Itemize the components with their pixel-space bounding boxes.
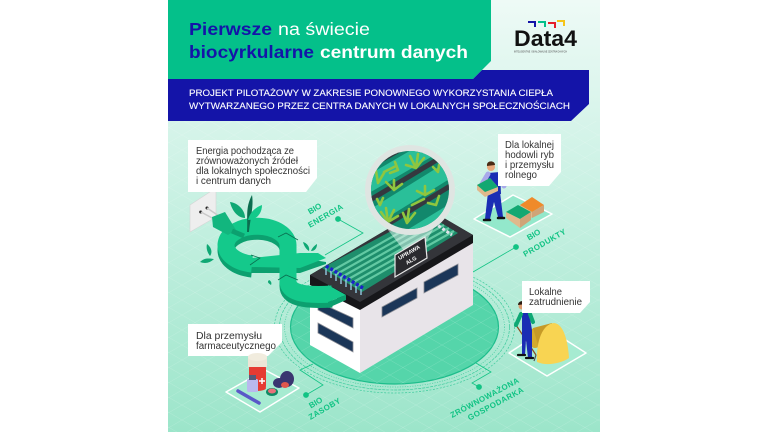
white connectors [430, 220, 452, 235]
connector lines [300, 216, 518, 398]
circular arrow [226, 226, 346, 308]
subtitle banner: WYTWARZANEGO PRZEZ CENTRA DANYCH W LOKALNYCH SPOŁECZNOŚCIACH [189, 100, 570, 112]
callout: energia: zrównoważonych źródeł [196, 156, 299, 167]
callout: zatrudnienie: Lokalne [529, 287, 562, 298]
arrow joints [250, 233, 298, 280]
right wall [360, 241, 473, 373]
ground circle [274, 261, 514, 393]
label: bio energia: BIO [306, 201, 323, 216]
subtitle banner [168, 70, 589, 121]
crate: greens [506, 205, 531, 228]
worker with crate [477, 161, 504, 220]
vial [247, 375, 258, 392]
building [310, 207, 473, 373]
crate held [477, 178, 498, 197]
label: zrownowazona gospodarka: ZRÓWNOWAŻONA [449, 376, 521, 420]
label: bio energia: ENERGIA [307, 202, 345, 230]
logo: Data4: Data4 [514, 26, 578, 51]
callout: energia: dla lokalnych społeczności [196, 166, 310, 177]
header: green title banner [168, 0, 491, 79]
algae tubes [330, 216, 454, 287]
logo: Data4: INTELIGENTNE I SKALOWALNE CENTRA DANYCH [514, 50, 567, 54]
plant leaves [200, 195, 317, 285]
worker with rake [516, 301, 536, 361]
callout: hodowla: i przemysłu [505, 160, 554, 171]
torso [488, 172, 501, 194]
products platform [474, 195, 552, 237]
pharma tray [226, 353, 299, 412]
callout: hodowla: hodowli ryb [505, 150, 554, 161]
head [487, 163, 495, 171]
label: zrownowazona gospodarka: GOSPODARKA [466, 385, 525, 422]
label: bio produkty: PRODUKTY [522, 227, 568, 259]
callout: energia [188, 140, 317, 192]
windows [318, 264, 458, 352]
plug [201, 208, 244, 236]
sign: uprawa alg: UPRAWA [398, 244, 421, 262]
callout: farmaceutyka [188, 324, 282, 356]
left wall [310, 282, 360, 373]
callout: hodowla: rolnego [505, 170, 537, 181]
title: na świecie [278, 19, 370, 39]
subtitle banner: PROJEKT PILOTAŻOWY W ZAKRESIE PONOWNEGO WYKORZYSTANIA CIEPŁA [189, 88, 554, 99]
magnifier lens [365, 145, 455, 250]
callout: farmaceutyka: Dla przemysłu [196, 331, 262, 342]
callout: energia: Energia pochodząca ze [196, 146, 294, 157]
rake [516, 325, 536, 355]
callout: farmaceutyka: farmaceutycznego [196, 341, 276, 352]
pill bottle [248, 353, 267, 391]
hay platform [509, 328, 586, 376]
title: Pierwsze [189, 19, 272, 39]
callout: hodowla: Dla lokalnej [505, 140, 554, 151]
arrow shadow sides [226, 231, 332, 299]
label: bio zasoby: ZASOBY [307, 396, 343, 422]
callout: zatrudnienie: zatrudnienie [529, 297, 582, 308]
compact [266, 371, 294, 396]
legs [485, 192, 503, 219]
sign: uprawa alg [395, 237, 427, 277]
syringe [238, 391, 259, 403]
wall socket [190, 188, 216, 232]
roof [310, 207, 473, 310]
body [522, 312, 532, 358]
callout: zatrudnienie [522, 281, 590, 313]
hay stack [528, 323, 569, 364]
crate: carrots [520, 197, 544, 218]
callout: energia: i centrum danych [196, 176, 271, 187]
title [189, 19, 468, 62]
arrow head [328, 285, 346, 302]
title: centrum danych [320, 42, 468, 62]
title: biocyrkularne [189, 42, 314, 62]
callout: hodowla [498, 134, 561, 186]
arrow faces [226, 226, 332, 294]
sign: uprawa alg: ALG [405, 256, 418, 267]
label: bio produkty: BIO [525, 227, 542, 242]
panel: background [168, 0, 600, 432]
label: bio zasoby: BIO [307, 395, 324, 410]
blue connectors [326, 268, 361, 295]
head [518, 302, 526, 310]
